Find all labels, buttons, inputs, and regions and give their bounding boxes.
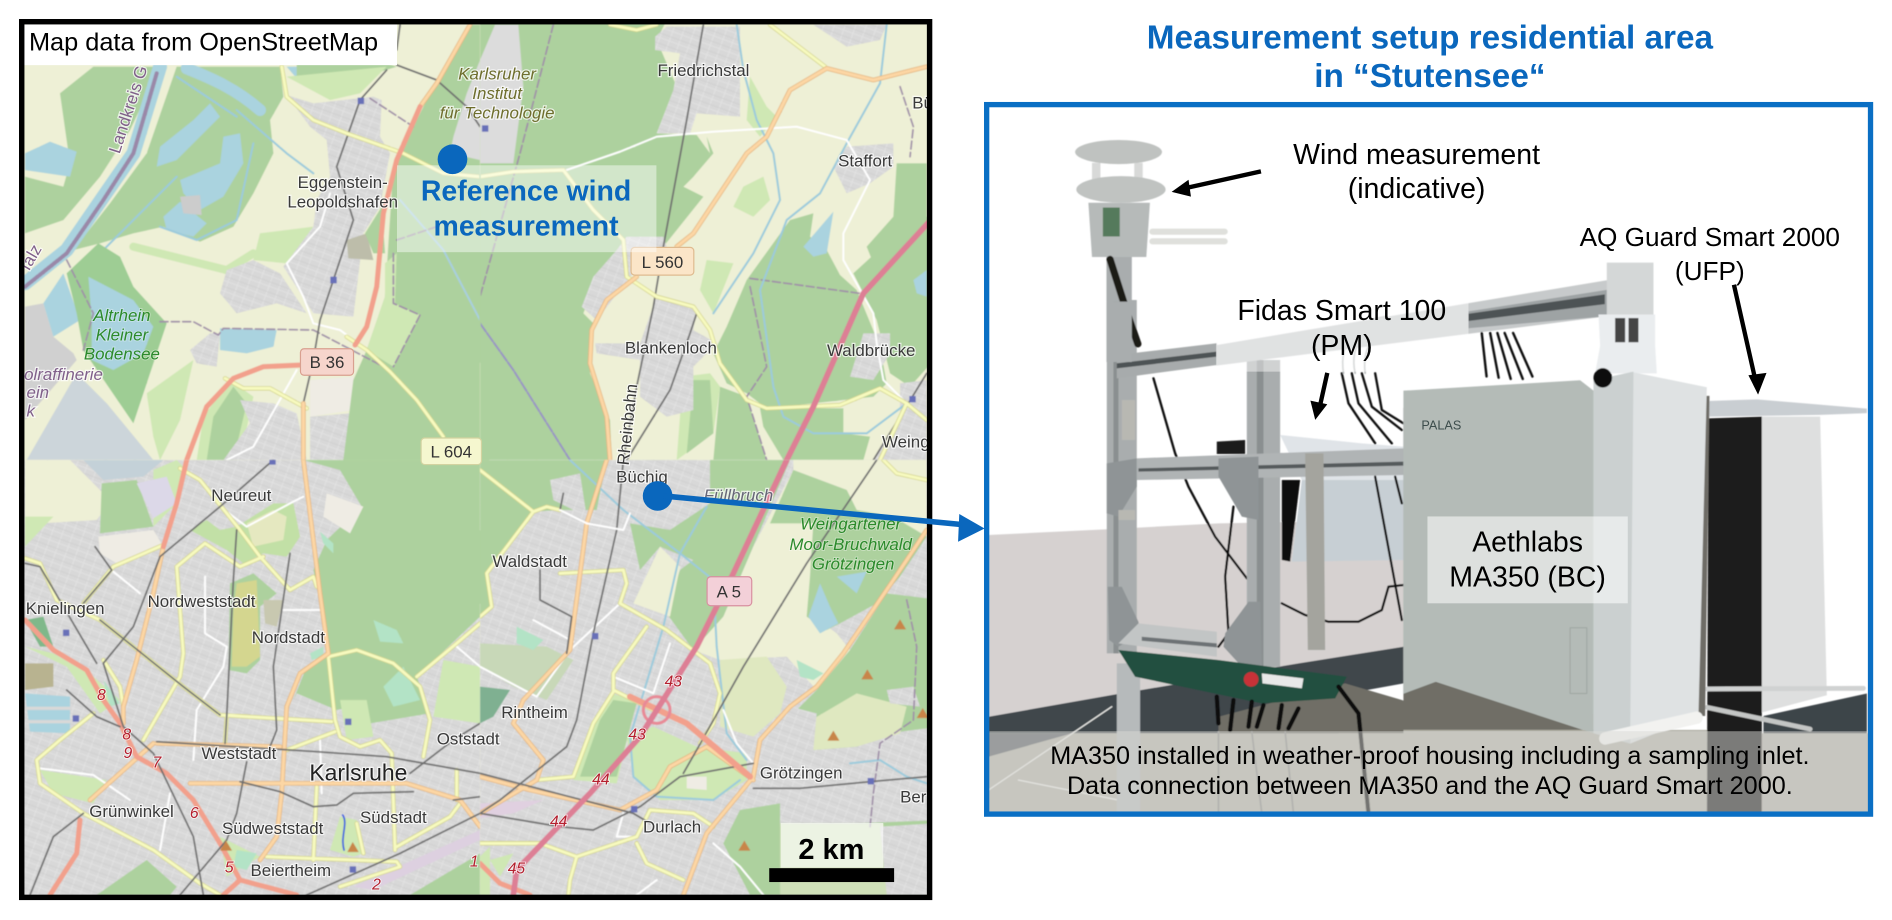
green power strip (1118, 650, 1347, 703)
arrow: Fidas (1320, 373, 1327, 405)
panel: photo of measurement setup (986, 104, 1871, 820)
map quadrant: north-east (480, 20, 940, 460)
place names: Grötzingen (812, 555, 894, 574)
photo scene (988, 140, 1870, 820)
motorway junction numbers: 8 (122, 727, 131, 744)
device behind frame (1292, 480, 1404, 562)
place names: Karlsruhe (309, 760, 407, 786)
place names: Leopoldshafen (287, 193, 398, 212)
place names: Bü (912, 94, 933, 113)
arrow: wind sensor (1185, 171, 1261, 188)
callout: AQ Guard: AQ Guard Smart 2000 (1580, 222, 1840, 252)
motorway junction numbers: 9 (124, 745, 133, 762)
arrowhead: wind sensor (1172, 180, 1191, 197)
scale bar: 2 km: 2 km (798, 834, 864, 866)
ground under housing (1402, 681, 1583, 731)
callout: Aethlabs MA350: MA350 (BC) (1449, 561, 1606, 593)
motorway junction numbers: 5 (225, 859, 234, 876)
place names: Knielingen (26, 599, 105, 618)
motorway junction numbers: 7 (153, 754, 163, 771)
place names: Durlach (643, 818, 701, 837)
place names: Blankenloch (625, 339, 717, 358)
place names: Institut (472, 84, 523, 103)
place names: Füllbruch (704, 486, 773, 505)
photo right part (1403, 263, 1870, 820)
place names: Grötzingen (760, 763, 842, 782)
callout: Aethlabs MA350 (1427, 516, 1628, 603)
motorway junction numbers: 44 (592, 771, 610, 788)
place names: Eggenstein- (298, 173, 388, 192)
arrow: AQ Guard (1734, 285, 1756, 381)
place names: Waldbrücke (827, 341, 915, 360)
place names: Neureut (211, 486, 272, 505)
place names: für Technologie (440, 103, 555, 122)
motorway junction numbers: 6 (190, 805, 199, 822)
place names: Weing (882, 433, 930, 452)
MA350 housing (1698, 395, 1710, 717)
road shields: B 36 (310, 353, 344, 372)
motorway junction numbers: 43 (628, 727, 646, 744)
PALAS logo: PALAS (1421, 419, 1461, 433)
photo upper-left sensor and beam (1075, 140, 1608, 379)
callout: Aethlabs MA350: Aethlabs (1472, 526, 1583, 558)
white attribution box (24, 24, 397, 65)
photo left part (989, 300, 1404, 812)
motorway junction numbers: 44 (550, 814, 568, 831)
caption band: MA350 installed in weather-proof housing including a sampling inlet. (1050, 742, 1810, 770)
place names: Weingartener (800, 515, 903, 534)
place names: k (27, 401, 37, 420)
place names: Moor-Bruchwald (789, 535, 913, 554)
PALAS front fill (1403, 390, 1436, 694)
caption band: Data connection between MA350 and the AQ Guard Smart 2000. (1067, 772, 1793, 800)
aluminium frame (1107, 300, 1137, 653)
place names: Weststadt (202, 744, 277, 763)
place names: Karlsruher (458, 65, 537, 84)
marker: Büchig site (643, 481, 672, 511)
map base: land use, water and roads (20, 20, 940, 900)
motorway junction numbers (97, 674, 682, 893)
map frame (22, 22, 930, 897)
AQ Guard housing (1762, 417, 1827, 713)
inlet tower (1607, 263, 1653, 315)
place names: Grünwinkel (89, 802, 174, 821)
place names: Büchig (616, 468, 668, 487)
place names: Altrhein (92, 306, 150, 325)
place names: olraffinerie (24, 365, 103, 384)
place names: Oststadt (437, 729, 500, 748)
title: measurement setup (1147, 19, 1713, 95)
place names: Nordstadt (252, 628, 325, 647)
callout: wind measurement: (indicative) (1348, 173, 1485, 205)
map quadrant: south-east (480, 460, 940, 900)
place names: ein (27, 383, 49, 402)
reference wind measurement label: Reference wind (421, 175, 631, 207)
callout: Fidas Smart 100 (1216, 287, 1468, 372)
road shields (300, 247, 752, 606)
motorway junction numbers: 2 (371, 876, 381, 893)
road shields: A 5 (717, 582, 741, 601)
marker: reference wind site (438, 144, 467, 174)
arrow: site to photo (664, 496, 985, 542)
callout: Fidas Smart 100: (PM) (1311, 330, 1373, 362)
arrowhead: AQ Guard (1748, 373, 1767, 395)
motorway junction numbers: 45 (508, 861, 525, 878)
place names: Südstadt (360, 808, 427, 827)
place names (16, 61, 933, 880)
map quadrant: north-west (20, 20, 480, 460)
map quadrant: south-west (20, 459, 480, 900)
road shields: L 560 (642, 253, 683, 272)
panel: OpenStreetMap map (16, 20, 940, 900)
place names: Staffort (838, 152, 893, 171)
reference wind measurement label: measurement (434, 210, 619, 242)
reference wind measurement label (397, 165, 656, 252)
place names: Friedrichstal (658, 61, 749, 80)
place names: Landkreis G (105, 63, 151, 156)
title: measurement setup: in “Stutensee“ (1314, 58, 1546, 95)
place names: Kleiner (96, 325, 150, 344)
place names: Bodensee (84, 345, 160, 364)
motorway junction numbers: 43 (665, 674, 682, 691)
attribution text: Map data from OpenStreetMap (29, 29, 378, 57)
place names: Nordweststadt (148, 592, 256, 611)
scale bar: 2 km (769, 823, 894, 882)
title: measurement setup: Measurement setup residential area (1147, 19, 1713, 56)
place names: Beiertheim (250, 861, 331, 880)
place names: Rintheim (501, 703, 568, 722)
place names: falz (16, 241, 46, 273)
arrowhead: Fidas (1310, 401, 1327, 420)
callout: AQ Guard: (UFP) (1675, 256, 1745, 286)
road shields: L 604 (430, 442, 472, 461)
callout: wind measurement: Wind measurement (1293, 139, 1540, 171)
motorway junction numbers: 8 (97, 687, 106, 704)
place names: Ber (900, 787, 927, 806)
caption band (989, 731, 1870, 812)
place names: Rheinbahn (614, 383, 641, 466)
place names: Südweststadt (222, 819, 324, 838)
panel frame (987, 105, 1871, 814)
place names: Waldstadt (493, 552, 567, 571)
callout: Fidas Smart 100: Fidas Smart 100 (1237, 295, 1446, 327)
motorway junction numbers: 1 (470, 853, 479, 870)
